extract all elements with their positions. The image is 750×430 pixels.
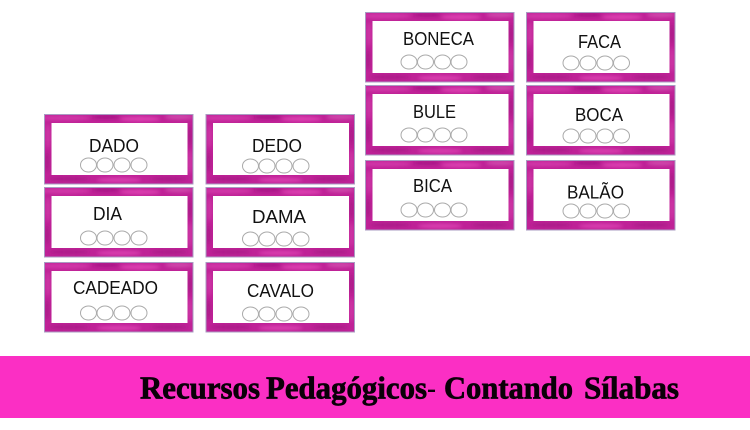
card: BOCA: BOCA — [575, 104, 624, 125]
card: DAMA — [206, 188, 354, 257]
card: BULE — [366, 86, 514, 155]
card: BOCA — [526, 86, 675, 155]
card: DIA — [44, 188, 193, 257]
card: DIA: DIA — [93, 203, 123, 224]
card: CAVALO: CAVALO — [247, 280, 314, 301]
title: - — [427, 370, 436, 406]
card: CADEADO — [44, 262, 193, 332]
card: DEDO — [206, 114, 354, 184]
title: Sílabas — [584, 370, 679, 406]
banner — [0, 356, 750, 418]
card: BALÃO — [526, 160, 675, 230]
card: BICA — [366, 160, 514, 230]
card: BONECA: BONECA — [403, 28, 475, 49]
card: FACA: FACA — [578, 31, 622, 52]
card: DADO: DADO — [89, 135, 139, 156]
card: DADO — [44, 114, 193, 184]
title: Recursos — [140, 370, 260, 406]
card: DAMA: DAMA — [252, 206, 307, 227]
card: BICA: BICA — [413, 175, 453, 196]
title: Pedagógicos — [266, 370, 427, 406]
card: CADEADO: CADEADO — [73, 277, 158, 298]
card: BALÃO: BALÃO — [567, 182, 624, 202]
card: FACA — [526, 12, 675, 82]
card: BONECA — [366, 12, 514, 82]
card: DEDO: DEDO — [252, 135, 302, 156]
title: Contando — [444, 370, 573, 406]
card: CAVALO — [206, 262, 354, 332]
card: BULE: BULE — [413, 101, 456, 122]
